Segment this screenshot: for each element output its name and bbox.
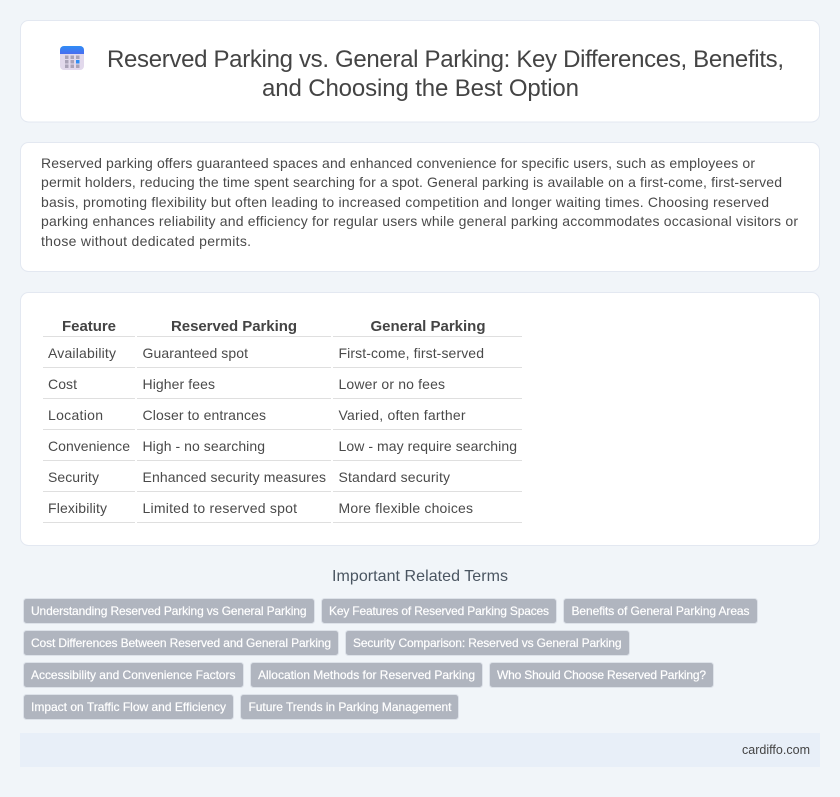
table row: availability: Guaranteed spot: [142, 345, 248, 361]
text block: introduction: Reserved parking offers guaranteed spaces and enhanced convenience for specific users, such as employees or: [41, 155, 755, 171]
tag: [322, 598, 556, 624]
tag: [24, 630, 338, 656]
tag: [346, 630, 630, 656]
tag: [490, 662, 714, 688]
table row: flexibility: More flexible choices: [338, 500, 473, 516]
tag: Cost Differences Between Reserved and General Parking: [31, 636, 331, 650]
table row: location: Varied, often farther: [338, 407, 466, 423]
heading: related terms: Important Related Terms: [332, 568, 508, 585]
tag: Who Should Choose Reserved Parking?: [497, 668, 706, 682]
table row: flexibility: Limited to reserved spot: [142, 500, 297, 516]
text block: introduction: permit holders, reducing the time spent searching for a spot. General parking is available on a first-come, first-served: [41, 174, 782, 190]
table row: availability: Availability: [48, 345, 116, 361]
tag: Security Comparison: Reserved vs General Parking: [353, 636, 622, 650]
table row: location: Closer to entrances: [142, 407, 266, 423]
title: Reserved Parking vs. General Parking: Key Differences, Benefits,: [107, 46, 784, 73]
tag: [24, 694, 234, 720]
table header: Reserved Parking: [171, 318, 297, 335]
tag: [24, 662, 244, 688]
table row: flexibility: Flexibility: [48, 500, 107, 516]
tag: [564, 598, 758, 624]
title: and Choosing the Best Option: [262, 75, 579, 102]
table row: cost: Lower or no fees: [338, 376, 445, 392]
tag: Key Features of Reserved Parking Spaces: [329, 604, 549, 618]
text block: introduction: those without dedicated permits.: [41, 233, 251, 249]
icon: calendar: [60, 46, 84, 70]
panel: comparison table: [20, 292, 820, 546]
table row: convenience: Convenience: [48, 438, 130, 454]
tag: Impact on Traffic Flow and Efficiency: [31, 700, 226, 714]
table row: cost: [43, 376, 522, 399]
tag: [240, 694, 458, 720]
table row: convenience: High - no searching: [142, 438, 265, 454]
table row: location: Location: [48, 407, 103, 423]
tag: Understanding Reserved Parking vs General Parking: [31, 604, 306, 618]
table row: cost: Cost: [48, 376, 77, 392]
table row: flexibility: [43, 500, 522, 523]
table row: cost: Higher fees: [142, 376, 215, 392]
panel: introduction: [20, 142, 820, 272]
tag: Benefits of General Parking Areas: [572, 604, 750, 618]
tag: Accessibility and Convenience Factors: [31, 668, 236, 682]
footer: cardiffo.com: [742, 743, 810, 757]
panel: header: [20, 20, 820, 122]
tag: Allocation Methods for Reserved Parking: [258, 668, 475, 682]
text block: introduction: basis, promoting flexibility but often leading to increased competition and longer waiting times. Choosing reserved: [41, 194, 769, 210]
table row: security: [43, 469, 522, 492]
tag: [24, 598, 314, 624]
title: [107, 46, 784, 102]
table header: Feature: [62, 318, 116, 335]
table row: availability: First-come, first-served: [338, 345, 484, 361]
table row: security: Enhanced security measures: [142, 469, 326, 485]
text block: introduction: [41, 155, 798, 249]
table row: security: Security: [48, 469, 99, 485]
panel: related term tags: [24, 598, 758, 720]
table header: General Parking: [370, 318, 486, 335]
footer: [20, 733, 820, 767]
tag: Future Trends in Parking Management: [248, 700, 452, 714]
tag: [250, 662, 482, 688]
table row: convenience: Low - may require searching: [338, 438, 517, 454]
text block: introduction: parking enhances reliability and efficiency for regular users while general parking accommodates occasional visitors or: [41, 213, 798, 229]
table row: convenience: [43, 438, 522, 461]
table row: security: Standard security: [338, 469, 450, 485]
table header: [43, 318, 522, 337]
table row: location: [43, 407, 522, 430]
table row: availability: [43, 345, 522, 368]
